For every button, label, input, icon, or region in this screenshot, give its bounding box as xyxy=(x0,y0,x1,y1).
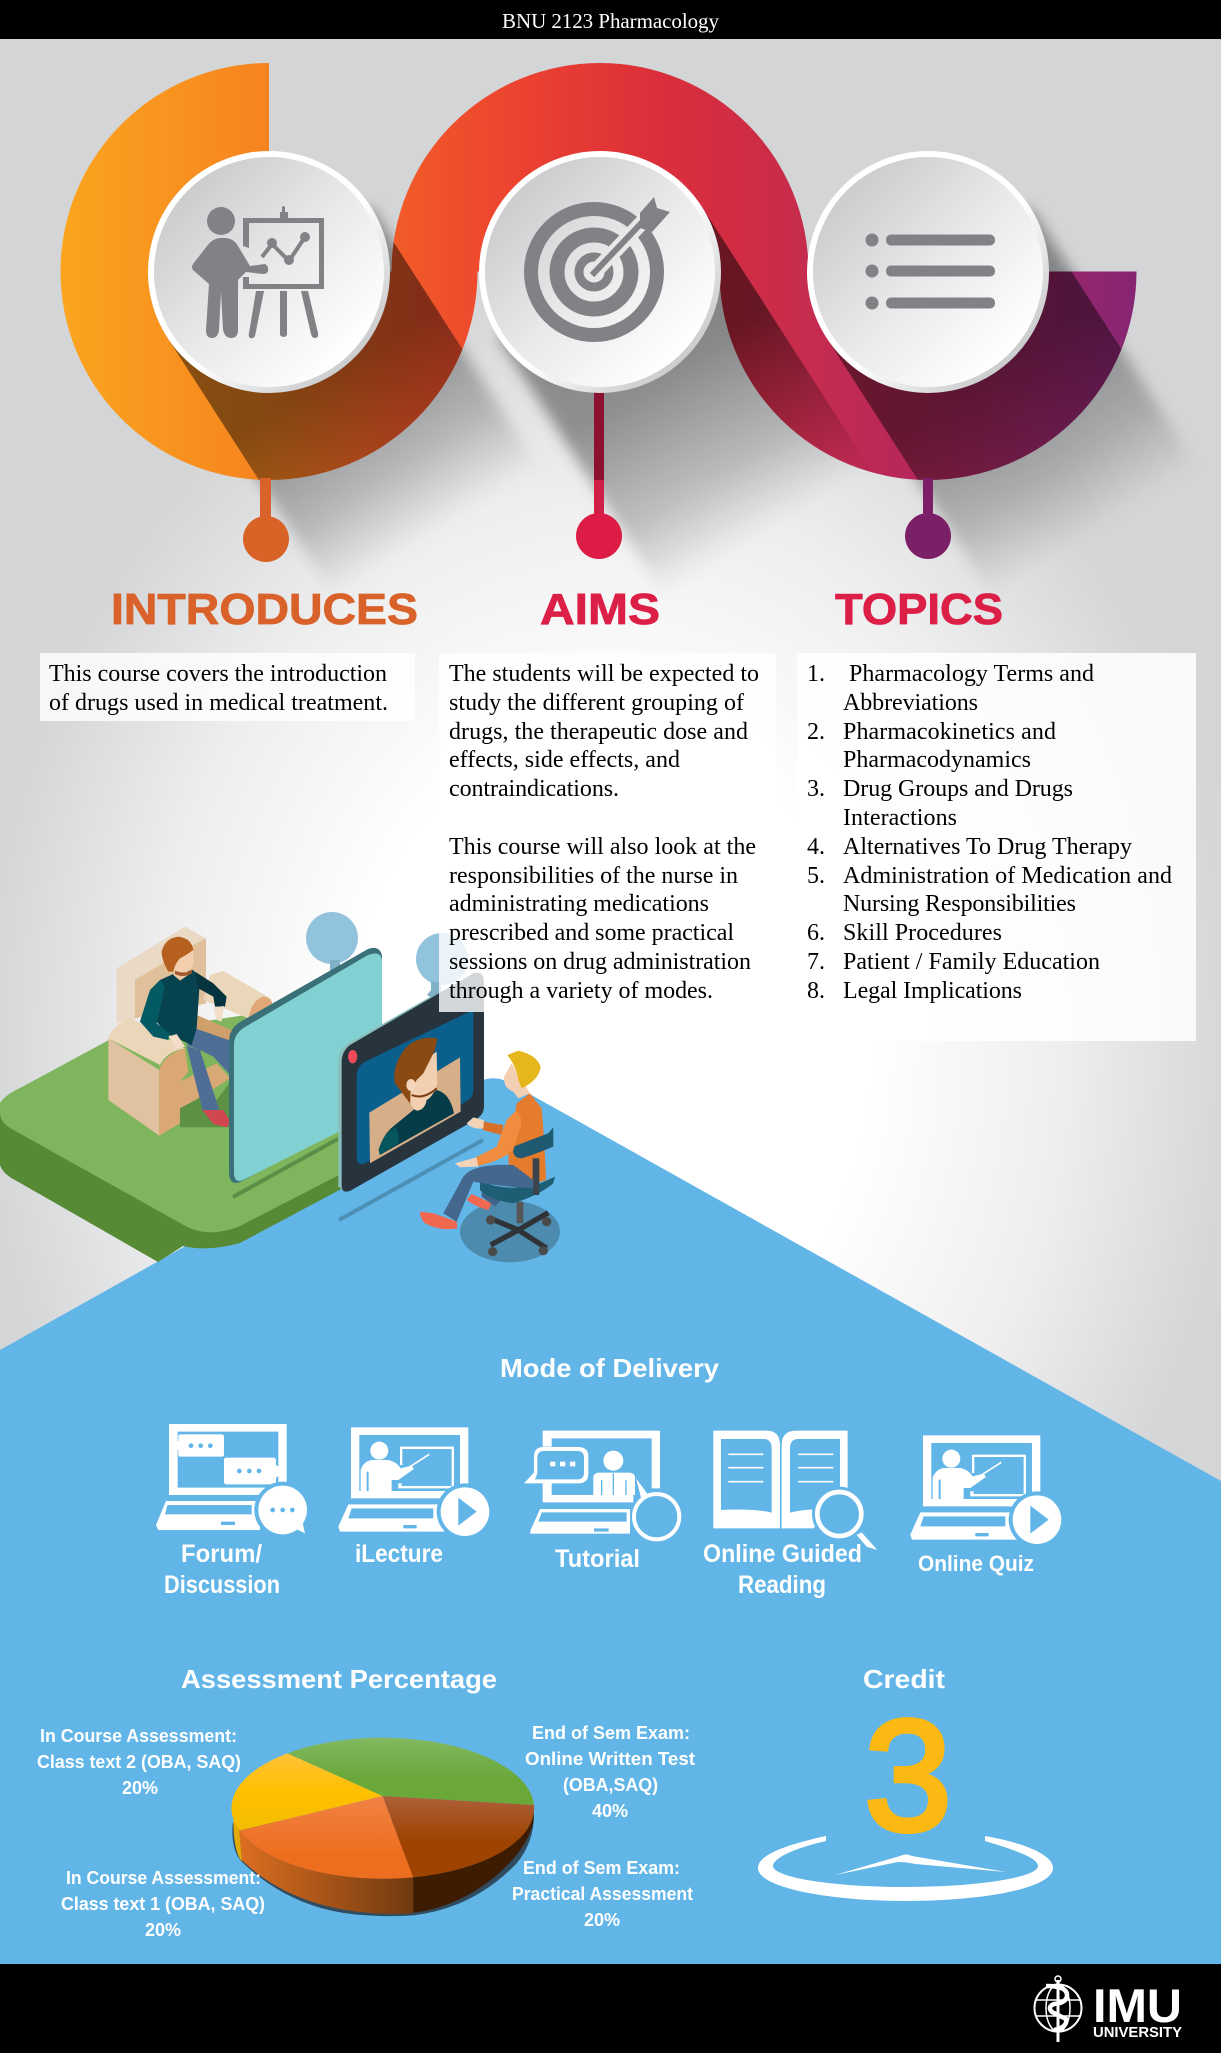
label: tutorial: Tutorial xyxy=(555,1545,640,1573)
teal screen panel xyxy=(229,948,382,1183)
text box: aims: effects, side effects, and xyxy=(449,747,680,773)
text box: topics: Alternatives To Drug Therapy xyxy=(843,834,1132,860)
pie label: class test 1: 20% xyxy=(145,1920,181,1940)
illustration: man in armchair xyxy=(108,927,272,1136)
label: forum / discussion xyxy=(164,1540,280,1599)
heading: credit: Credit xyxy=(863,1664,945,1694)
logo: IMU University xyxy=(1034,1976,1182,2042)
text box: topics: 8. xyxy=(807,978,825,1004)
icon: online quiz xyxy=(910,1435,1065,1548)
pie label: class test 1 xyxy=(61,1868,265,1940)
text box: aims: contraindications. xyxy=(449,776,619,802)
long shadows on background xyxy=(167,207,1221,673)
pie label: online written test: End of Sem Exam: xyxy=(532,1723,690,1743)
label: online guided reading: Reading xyxy=(738,1571,826,1599)
dial under credit number xyxy=(758,1836,1053,1901)
label: ilecture: iLecture xyxy=(355,1540,443,1568)
text box: aims: administrating medications xyxy=(449,891,709,917)
text box: topics: 2. xyxy=(807,719,825,745)
circle: topics xyxy=(807,151,1049,393)
blue lower panel xyxy=(0,1078,1221,1964)
pie label: practical assessment: End of Sem Exam: xyxy=(523,1858,680,1878)
text box: aims: responsibilities of the nurse in xyxy=(449,863,738,889)
pie label: class test 2: 20% xyxy=(122,1778,158,1798)
label: forum / discussion: Forum/ xyxy=(181,1540,262,1568)
bottom black bar xyxy=(0,1964,1221,2053)
heading: assessment percentage: Assessment Percentage xyxy=(181,1664,497,1694)
text box: topics: Skill Procedures xyxy=(843,920,1002,946)
text box: aims: drugs, the therapeutic dose and xyxy=(449,719,748,745)
heading: mode of delivery: Mode of Delivery xyxy=(500,1353,720,1383)
pie label: online written test: 40% xyxy=(592,1801,628,1821)
ribbon shadows xyxy=(167,207,1122,480)
text box: aims: sessions on drug administration xyxy=(449,949,751,975)
icon: online guided reading xyxy=(713,1431,877,1550)
text box: topics: Abbreviations xyxy=(843,690,978,716)
text box: topics: Drug Groups and Drugs xyxy=(843,776,1073,802)
text box: topics: Legal Implications xyxy=(843,978,1022,1004)
text box: topics: Pharmacology Terms and xyxy=(849,661,1094,687)
text box: introduces xyxy=(40,653,415,721)
pie label: class test 2: Class text 2 (OBA, SAQ) xyxy=(37,1752,241,1772)
label: online guided reading xyxy=(703,1540,862,1599)
pie label: class test 2: In Course Assessment: xyxy=(40,1726,237,1746)
text box: topics: 6. xyxy=(807,920,825,946)
text box: aims: This course will also look at the xyxy=(449,834,756,860)
text box: introduces: This course covers the introduction xyxy=(49,661,387,687)
pie label: online written test: Online Written Test xyxy=(525,1749,695,1769)
text box: topics: Patient / Family Education xyxy=(843,949,1100,975)
heading: aims: AIMS xyxy=(540,585,660,634)
pie label: practical assessment: 20% xyxy=(584,1910,620,1930)
illustration: line on floor xyxy=(339,1140,483,1220)
pie label: online written test: (OBA,SAQ) xyxy=(563,1775,658,1795)
pie label: practical assessment xyxy=(512,1858,693,1930)
heading: topics: TOPICS xyxy=(835,585,1003,634)
icon: tutorial xyxy=(524,1431,683,1543)
logo subtitle: UNIVERSITY xyxy=(1093,2025,1182,2041)
balloon left xyxy=(306,912,358,983)
text box: topics: 1. xyxy=(807,661,825,687)
icon: list xyxy=(866,234,995,310)
text box: topics: 7. xyxy=(807,949,825,975)
pie label: online written test xyxy=(525,1723,695,1821)
text box: topics: 5. xyxy=(807,863,825,889)
pin: aims xyxy=(576,390,622,559)
text box: topics: 3. xyxy=(807,776,825,802)
text box: aims xyxy=(439,653,776,1012)
pie label: class test 1: In Course Assessment: xyxy=(66,1868,261,1888)
icon: presenter at board xyxy=(192,206,324,338)
icon: ilecture xyxy=(338,1427,493,1540)
label: forum / discussion: Discussion xyxy=(164,1571,280,1599)
logo wordmark: IMU xyxy=(1093,1979,1182,2032)
text box: topics xyxy=(797,653,1196,1041)
pie label: class test 1: Class text 1 (OBA, SAQ) xyxy=(61,1894,265,1914)
green platform xyxy=(0,1000,345,1262)
label: online quiz: Online Quiz xyxy=(918,1551,1034,1576)
title: BNU 2123 Pharmacology xyxy=(502,9,720,33)
text box: aims: through a variety of modes. xyxy=(449,978,713,1004)
icon: target with arrow xyxy=(531,197,670,335)
heading: introduces: INTRODUCES xyxy=(111,585,418,634)
text box: aims: prescribed and some practical xyxy=(449,920,734,946)
pie label: practical assessment: Practical Assessment xyxy=(512,1884,693,1904)
credit number: 3 xyxy=(864,1688,952,1864)
text box: topics: Pharmacokinetics and xyxy=(843,719,1056,745)
text box: topics: Pharmacodynamics xyxy=(843,747,1031,773)
icon: forum / discussion xyxy=(156,1424,311,1538)
text box: aims: The students will be expected to xyxy=(449,661,759,687)
pie chart xyxy=(231,1738,534,1916)
label: online guided reading: Online Guided xyxy=(703,1540,862,1568)
pie label: class test 2 xyxy=(37,1726,241,1798)
text box: aims: study the different grouping of xyxy=(449,690,744,716)
illustration: man in office chair xyxy=(420,1051,560,1262)
illustration: video monitor xyxy=(338,973,484,1192)
top title bar xyxy=(0,0,1221,39)
circle: introduces xyxy=(148,151,390,393)
icon: globe with serpent staff xyxy=(1034,1976,1082,2042)
ribbon wave xyxy=(60,63,1136,480)
pin: introduces xyxy=(243,478,289,562)
text box: topics: 4. xyxy=(807,834,825,860)
text box: topics: Administration of Medication and xyxy=(843,863,1172,889)
pin: topics xyxy=(905,478,951,559)
balloon right xyxy=(416,933,468,1000)
text box: introduces: of drugs used in medical treatment. xyxy=(49,690,388,716)
text box: topics: Nursing Responsibilities xyxy=(843,891,1076,917)
text box: topics: Interactions xyxy=(843,805,957,831)
circle: aims xyxy=(479,151,721,393)
